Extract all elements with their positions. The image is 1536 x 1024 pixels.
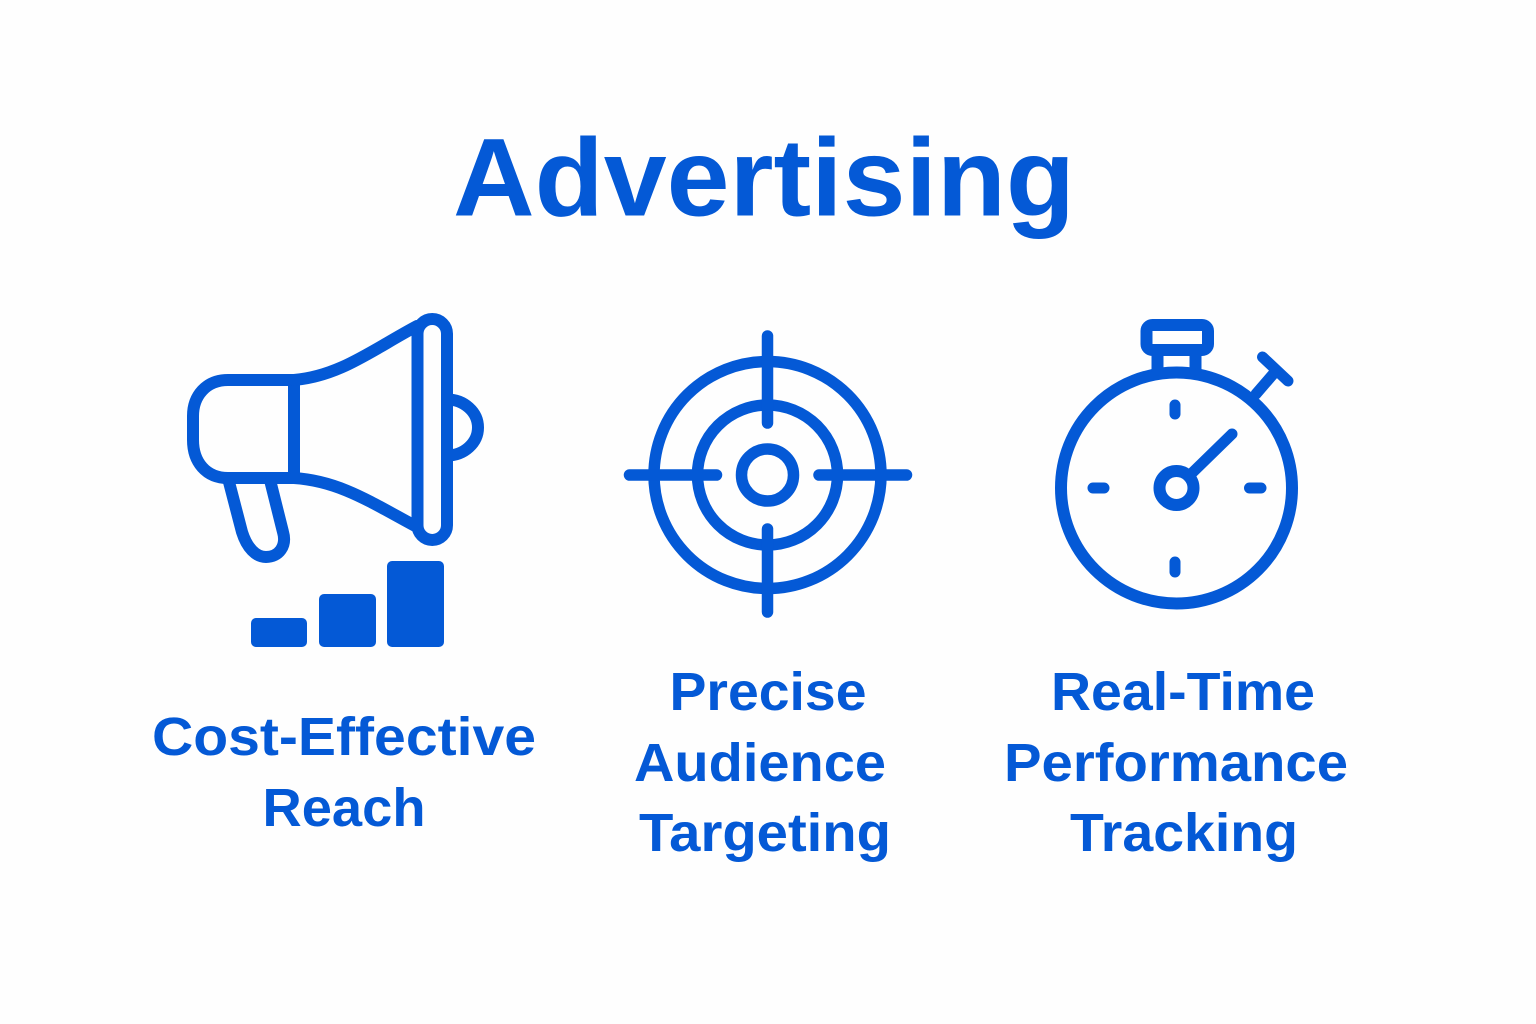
label: real-time performance tracking: Performance [1004, 733, 1348, 793]
label: cost-effective reach [152, 707, 536, 838]
label: cost-effective reach: Reach [262, 778, 426, 838]
label: precise audience targeting: Precise [670, 662, 866, 722]
label: precise audience targeting [634, 662, 891, 863]
icon: stopwatch [1061, 325, 1292, 604]
icon: target crosshair [630, 336, 906, 612]
label: real-time performance tracking: Real-Time [1051, 662, 1315, 722]
icon: megaphone with bars [193, 319, 478, 647]
label: precise audience targeting: Audience [634, 733, 886, 793]
label: cost-effective reach: Cost-Effective [152, 707, 536, 767]
label: real-time performance tracking [1004, 662, 1348, 863]
label: precise audience targeting: Targeting [639, 803, 891, 863]
title: Advertising [453, 116, 1075, 240]
label: real-time performance tracking: Tracking [1070, 803, 1298, 863]
